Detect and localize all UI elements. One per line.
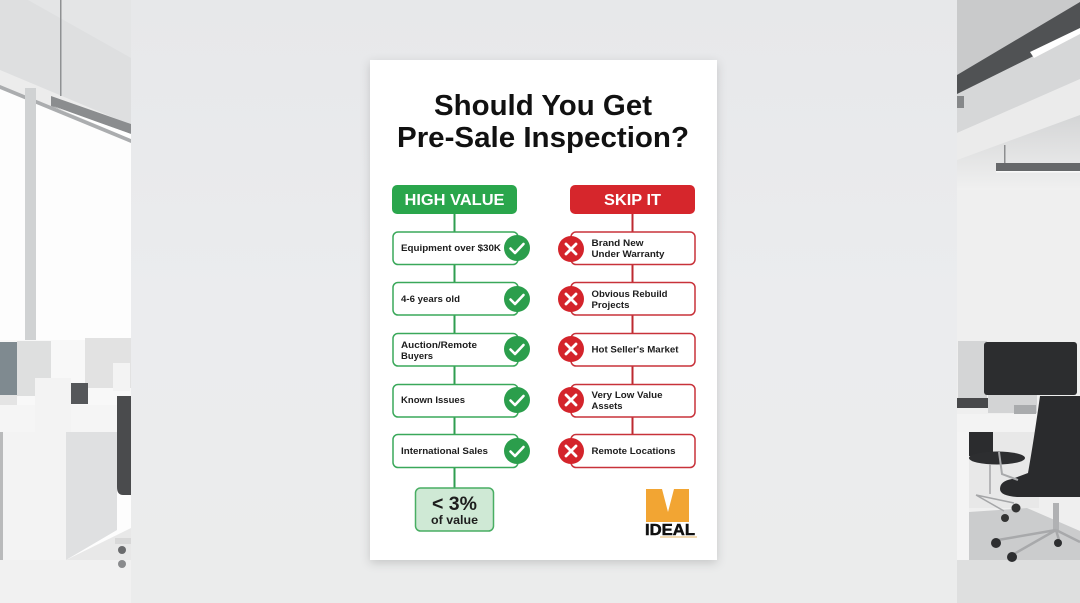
- item: hot seller's market: Hot Seller's Market: [592, 344, 679, 356]
- item: 4-6 years old: 4-6 years old: [401, 294, 460, 305]
- panel: high value column: [392, 185, 530, 531]
- item: known issues: Known Issues: [401, 395, 465, 406]
- wall: [131, 0, 957, 603]
- heading: high value: HIGH VALUE: [404, 192, 505, 209]
- item: brand new under warranty: [558, 232, 695, 264]
- heading: skip it: [570, 185, 695, 214]
- item: brand new under warranty: Under Warranty: [592, 249, 665, 260]
- item: equipment over $30K: Equipment over $30K: [401, 243, 501, 254]
- item: auction/remote buyers: Auction/Remote: [401, 340, 477, 351]
- logo: ideal: IDEAL: [645, 522, 695, 539]
- callout: less than 3% of value: < 3%: [432, 494, 477, 515]
- title: Should You Get: [434, 90, 652, 122]
- item: very low value assets: [558, 384, 695, 417]
- panel: skip it column: [558, 185, 695, 468]
- callout: less than 3% of value: of value: [431, 515, 478, 527]
- item: remote locations: Remote Locations: [592, 446, 676, 457]
- item: hot seller's market: [558, 334, 695, 366]
- item: auction/remote buyers: Buyers: [401, 351, 433, 362]
- scene: right office: [957, 0, 1080, 603]
- logo: ideal: [645, 489, 697, 539]
- item: obvious rebuild projects: Obvious Rebuild: [592, 289, 668, 300]
- scene: left office: [0, 0, 131, 603]
- item: very low value assets: Very Low Value: [592, 390, 662, 401]
- connector: red spine: [632, 214, 634, 434]
- title: Pre-Sale Inspection?: [397, 122, 689, 154]
- item: international sales: [393, 434, 530, 468]
- item: 4-6 years old: [393, 282, 530, 315]
- item: equipment over $30K: [393, 232, 530, 264]
- item: international sales: International Sales: [401, 446, 488, 457]
- poster: [370, 60, 717, 560]
- item: auction/remote buyers: [393, 334, 530, 366]
- item: known issues: [393, 384, 530, 417]
- title: [397, 90, 689, 154]
- item: obvious rebuild projects: [558, 282, 695, 315]
- heading: high value: [392, 185, 517, 214]
- item: brand new under warranty: Brand New: [592, 238, 644, 249]
- item: remote locations: [558, 434, 695, 468]
- item: obvious rebuild projects: Projects: [592, 300, 630, 311]
- callout: less than 3% of value: [416, 488, 494, 531]
- heading: skip it: SKIP IT: [604, 192, 661, 209]
- item: very low value assets: Assets: [592, 401, 622, 412]
- connector: green spine: [454, 214, 456, 488]
